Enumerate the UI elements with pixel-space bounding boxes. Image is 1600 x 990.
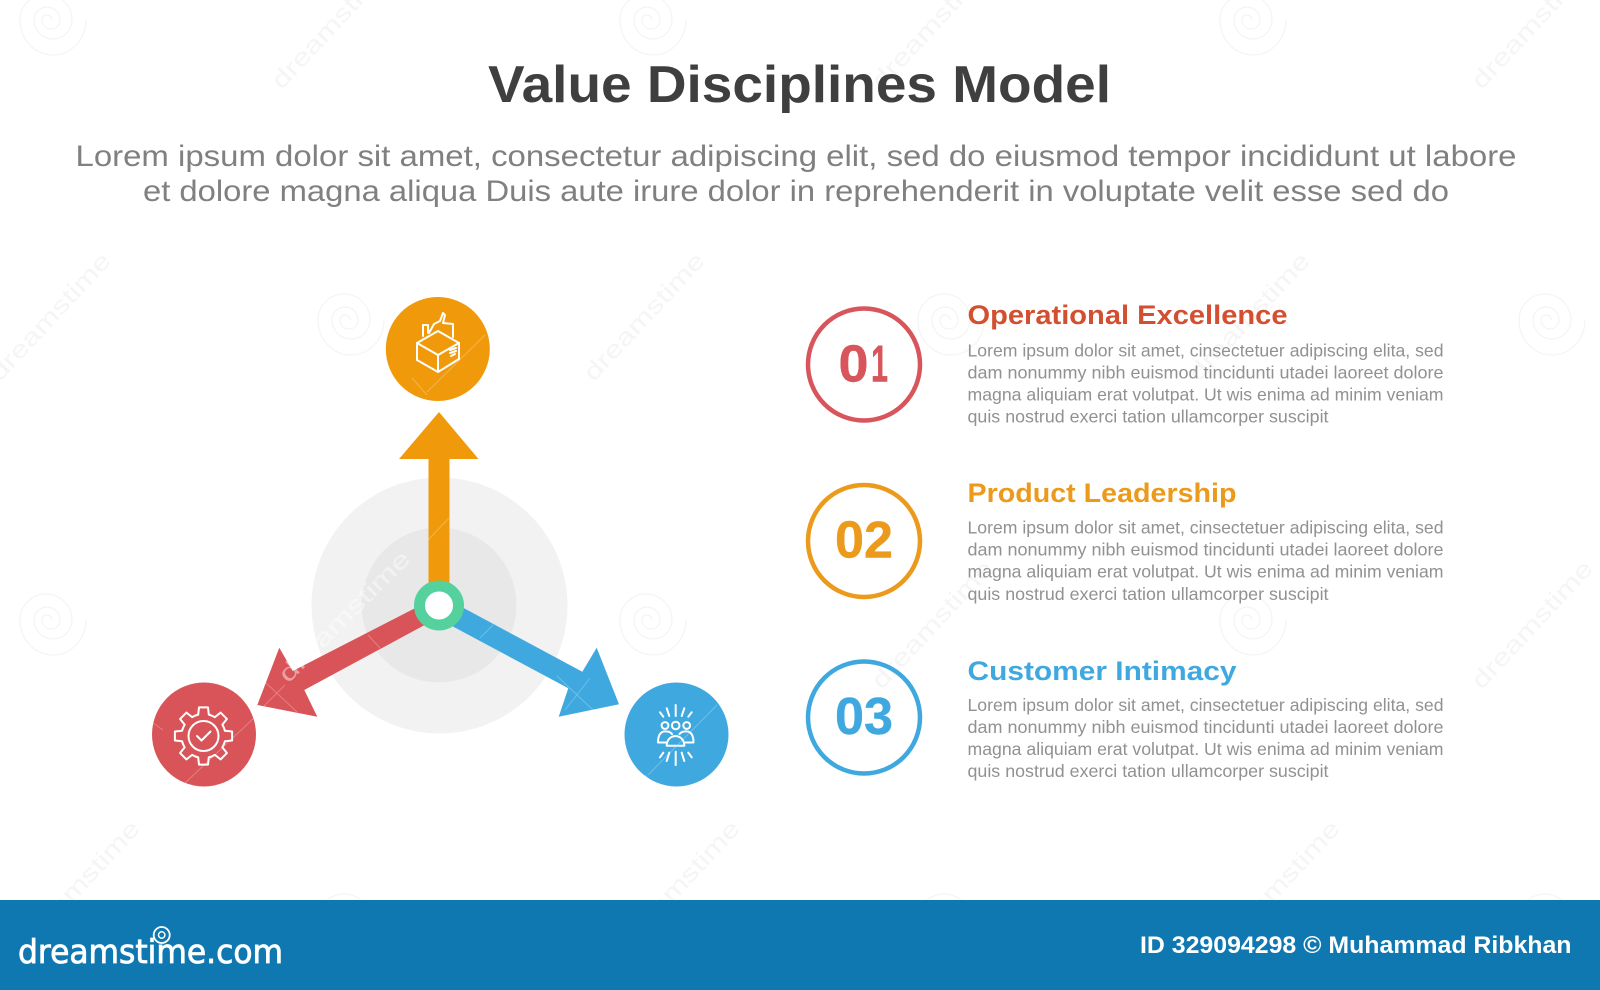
body text: magna aliquiam erat volutpat. Ut wis enima ad minim veniam [968, 739, 1444, 759]
arrow: up orange [399, 412, 478, 600]
watermark pattern: dreamstime [1213, 815, 1346, 954]
panel: item 01 Operational Excellence [808, 300, 1444, 426]
body text: magna aliquiam erat volutpat. Ut wis enima ad minim veniam [968, 562, 1444, 582]
number badge 02: 02 [835, 512, 893, 570]
icon: blue circle with team [624, 682, 728, 786]
watermark over diagram: dreamstime [273, 545, 416, 688]
arrow: lower right blue [435, 598, 619, 717]
watermark pattern: dreamstime [613, 815, 746, 954]
body text [968, 518, 1444, 604]
subtitle text: et dolore magna aliqua Duis aute irure dolor in reprehenderit in voluptate velit esse sed do [143, 175, 1449, 208]
footer bar [0, 900, 1600, 990]
heading: Operational Excellence [968, 300, 1288, 330]
arrow: lower left red [257, 600, 440, 717]
body text: magna aliquiam erat volutpat. Ut wis enima ad minim veniam [968, 384, 1444, 404]
background circles [312, 478, 568, 734]
body text: dam nonummy nibh euismod tincidunti utadei laoreet dolore [968, 540, 1444, 560]
body text: dam nonummy nibh euismod tincidunti utadei laoreet dolore [968, 362, 1444, 382]
title: Value Disciplines Model [488, 56, 1111, 114]
heading: Product Leadership [968, 478, 1236, 508]
body text: Lorem ipsum dolor sit amet, cinsectetuer adipiscing elita, sed [968, 340, 1444, 360]
panel: radial arrow diagram [152, 297, 728, 786]
icon: orange circle with box and thumbs up [386, 297, 490, 401]
watermark pattern: dreamstime [578, 247, 711, 386]
panel: item 03 Customer Intimacy [808, 656, 1444, 781]
body text [968, 695, 1444, 781]
watermark pattern: dreamstime [13, 815, 146, 954]
number badge 01: 0 [838, 336, 868, 394]
number badge 03: 03 [835, 688, 893, 746]
body text: quis nostrud exerci tation ullamcorper suscipit [968, 406, 1329, 426]
number badge 01 [808, 308, 920, 420]
body text: quis nostrud exerci tation ullamcorper suscipit [968, 761, 1329, 781]
icon: red circle with gear and check [152, 682, 256, 786]
body text: Lorem ipsum dolor sit amet, cinsectetuer adipiscing elita, sed [968, 695, 1444, 715]
center hub [420, 586, 458, 625]
watermark pattern: dreamstime [866, 555, 999, 694]
number badge 01: 1 [871, 336, 888, 394]
body text: Lorem ipsum dolor sit amet, cinsectetuer adipiscing elita, sed [968, 518, 1444, 538]
footer credit: ID 329094298 © Muhammad Ribkhan [1140, 932, 1572, 959]
number badge 02 [808, 485, 920, 597]
panel: item 02 Product Leadership [808, 478, 1444, 604]
watermark pattern: dreamstime [1183, 247, 1316, 386]
watermark pattern: dreamstime [1466, 555, 1599, 694]
body text [968, 340, 1444, 426]
subtitle text: Lorem ipsum dolor sit amet, consectetur adipiscing elit, sed do eiusmod tempor incididunt ut labore [76, 140, 1516, 173]
body text: dam nonummy nibh euismod tincidunti utadei laoreet dolore [968, 717, 1444, 737]
footer logo: dreamstime.com [18, 932, 283, 971]
subtitle text [76, 140, 1516, 208]
heading: Customer Intimacy [968, 656, 1236, 686]
number badge 03 [808, 662, 920, 774]
body text: quis nostrud exerci tation ullamcorper suscipit [968, 584, 1329, 604]
